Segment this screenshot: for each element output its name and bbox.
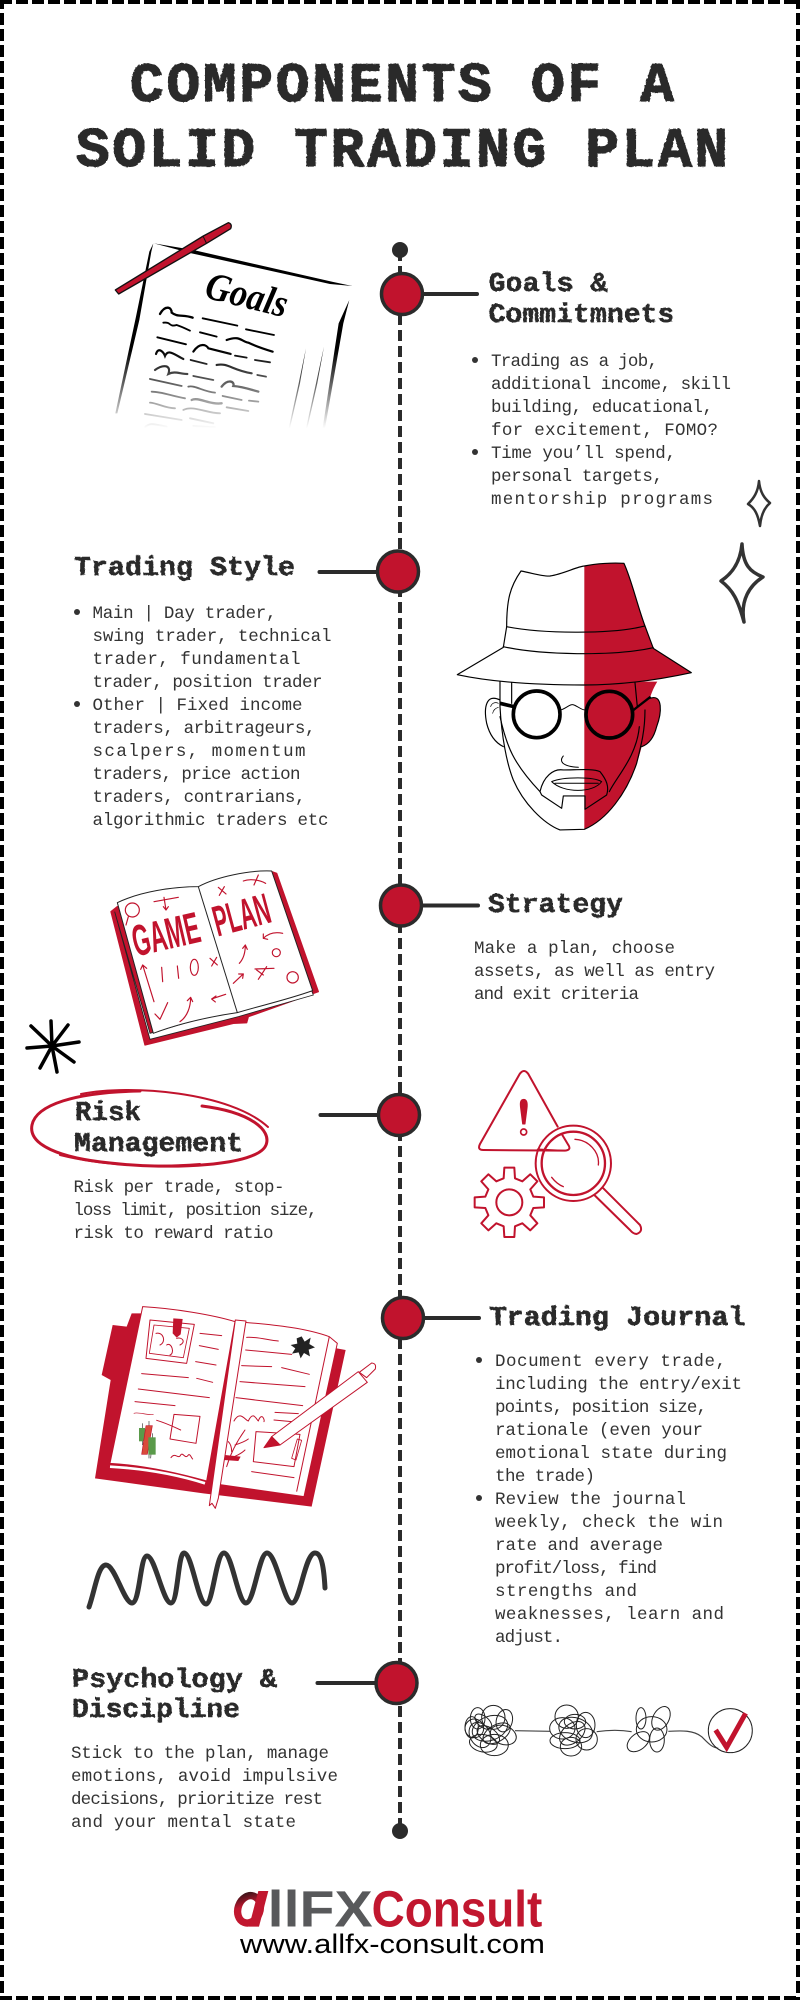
illustration: face with hat bbox=[457, 563, 691, 830]
handwritten goals word: Goals bbox=[201, 263, 293, 326]
text: trading style: algorithmic traders etc bbox=[92, 811, 328, 831]
node: strategy bbox=[380, 885, 478, 926]
node: trading style bbox=[320, 551, 418, 592]
knot 2 bbox=[555, 1705, 578, 1728]
text: goals: Time you’ll spend, bbox=[491, 444, 676, 464]
text: psychology and discipline bbox=[71, 1744, 338, 1833]
text: trading journal: strengths and bbox=[495, 1582, 637, 1602]
heading: goals: Commitmnets bbox=[488, 301, 674, 331]
highlight: red hand-drawn ellipse bbox=[32, 1090, 268, 1166]
playbook marks bbox=[125, 875, 298, 1022]
text: trading journal: weekly, check the win bbox=[495, 1513, 723, 1533]
heading: risk management bbox=[74, 1099, 243, 1160]
node: trading journal bbox=[382, 1298, 479, 1338]
heading: trading journal: Trading Journal bbox=[490, 1304, 746, 1334]
text: risk management: loss limit, position size, bbox=[74, 1201, 318, 1221]
candlesticks bbox=[139, 1421, 155, 1458]
logo: Consult bbox=[372, 1881, 542, 1938]
text: trading journal: including the entry/exit bbox=[495, 1375, 742, 1395]
node: psychology and discipline bbox=[318, 1662, 417, 1704]
text: trading style: traders, arbitrageurs, bbox=[92, 719, 316, 739]
icon: asterisk bbox=[27, 1021, 79, 1072]
text: trading journal: rationale (even your bbox=[495, 1421, 703, 1441]
text: goals: building, educational, bbox=[491, 398, 713, 418]
text: psychology and discipline: and your mental state bbox=[71, 1813, 296, 1833]
knot 1 bbox=[470, 1708, 485, 1729]
logo bbox=[234, 1881, 542, 1938]
icon: zigzag squiggle bbox=[89, 1553, 325, 1607]
game plan lettering: GAME bbox=[127, 903, 205, 966]
heading: trading style: Trading Style bbox=[74, 554, 295, 584]
text: trading style: trader, position trader bbox=[92, 673, 322, 693]
timeline dashed line bbox=[392, 242, 408, 1839]
text: trading journal: profit/loss, find bbox=[495, 1559, 657, 1579]
text: goals: Trading as a job, bbox=[491, 352, 658, 372]
pen bbox=[264, 1363, 376, 1448]
notes lines bbox=[134, 1320, 309, 1478]
text: goals: for excitement, FOMO? bbox=[491, 421, 718, 441]
illustration: trading journal notebook bbox=[95, 1307, 376, 1508]
icon: small sparkle bbox=[748, 481, 770, 526]
heading: goals: Goals & bbox=[488, 270, 608, 300]
text: goals: personal targets, bbox=[491, 467, 663, 487]
text: trading style: Other | Fixed income bbox=[92, 696, 302, 716]
text: trading style: swing trader, technical bbox=[92, 627, 332, 647]
text: trading journal: Review the journal bbox=[495, 1490, 686, 1510]
illustration: goals paper and pen bbox=[115, 223, 352, 428]
text: strategy: and exit criteria bbox=[474, 985, 639, 1005]
illustration: warning, gear and magnifier bbox=[475, 1071, 641, 1237]
website url: www.allfx-consult.com bbox=[239, 1929, 545, 1959]
heading: goals bbox=[488, 270, 674, 331]
text: trading journal: Document every trade, bbox=[495, 1352, 726, 1372]
logo: llFX bbox=[268, 1881, 373, 1938]
title: COMPONENTS OF A bbox=[130, 54, 674, 118]
text: risk management: risk to reward ratio bbox=[74, 1224, 274, 1244]
text: strategy bbox=[474, 939, 715, 1005]
text: trading style: scalpers, momentum bbox=[92, 742, 306, 762]
heading: psychology and discipline: Psychology & bbox=[72, 1666, 278, 1696]
text: trading style bbox=[74, 604, 332, 831]
red pen bbox=[115, 223, 231, 294]
text: psychology and discipline: Stick to the plan, manage bbox=[71, 1744, 329, 1764]
text: trading journal: rate and average bbox=[495, 1536, 663, 1556]
text: risk management bbox=[74, 1178, 318, 1244]
text: trading journal bbox=[476, 1352, 742, 1648]
illustration: game plan book bbox=[111, 871, 318, 1045]
text: goals bbox=[472, 352, 731, 510]
text: psychology and discipline: emotions, avoid impulsive bbox=[71, 1767, 338, 1787]
knot 3 bbox=[636, 1708, 646, 1729]
ribbon bbox=[209, 1320, 246, 1508]
icon: large sparkle bbox=[721, 544, 763, 622]
text: trading style: Main | Day trader, bbox=[92, 604, 276, 624]
text: risk management: Risk per trade, stop- bbox=[74, 1178, 284, 1198]
heading: psychology and discipline: Discipline bbox=[72, 1696, 240, 1726]
text: trading journal: emotional state during bbox=[495, 1444, 727, 1464]
heading: risk management: Management bbox=[74, 1130, 243, 1160]
node: goals bbox=[382, 274, 477, 314]
text: trading journal: points, position size, bbox=[495, 1398, 707, 1418]
scribbled lines bbox=[145, 308, 274, 427]
text: psychology and discipline: decisions, prioritize rest bbox=[71, 1790, 323, 1810]
logo mark bbox=[234, 1892, 264, 1926]
text: trading journal: the trade) bbox=[495, 1467, 595, 1487]
text: trading journal: adjust. bbox=[495, 1628, 563, 1648]
heading: psychology and discipline bbox=[72, 1666, 278, 1726]
title bbox=[76, 54, 728, 183]
text: trading style: trader, fundamental bbox=[92, 650, 300, 670]
text: goals: mentorship programs bbox=[491, 490, 713, 510]
text: trading style: traders, contrarians, bbox=[92, 788, 306, 808]
node: risk management bbox=[320, 1094, 420, 1136]
text: trading style: traders, price action bbox=[92, 765, 300, 785]
game plan lettering: PLAN bbox=[208, 885, 276, 946]
heading: risk management: Risk bbox=[75, 1099, 141, 1129]
star stamp bbox=[291, 1336, 315, 1358]
illustration: tangled line to check mark bbox=[465, 1703, 752, 1756]
text: trading journal: weaknesses, learn and bbox=[495, 1605, 724, 1625]
text: goals: additional income, skill bbox=[491, 375, 731, 395]
heading: strategy: Strategy bbox=[488, 891, 623, 921]
text: strategy: Make a plan, choose bbox=[474, 939, 675, 959]
text: strategy: assets, as well as entry bbox=[474, 962, 715, 982]
title: SOLID TRADING PLAN bbox=[76, 119, 728, 183]
